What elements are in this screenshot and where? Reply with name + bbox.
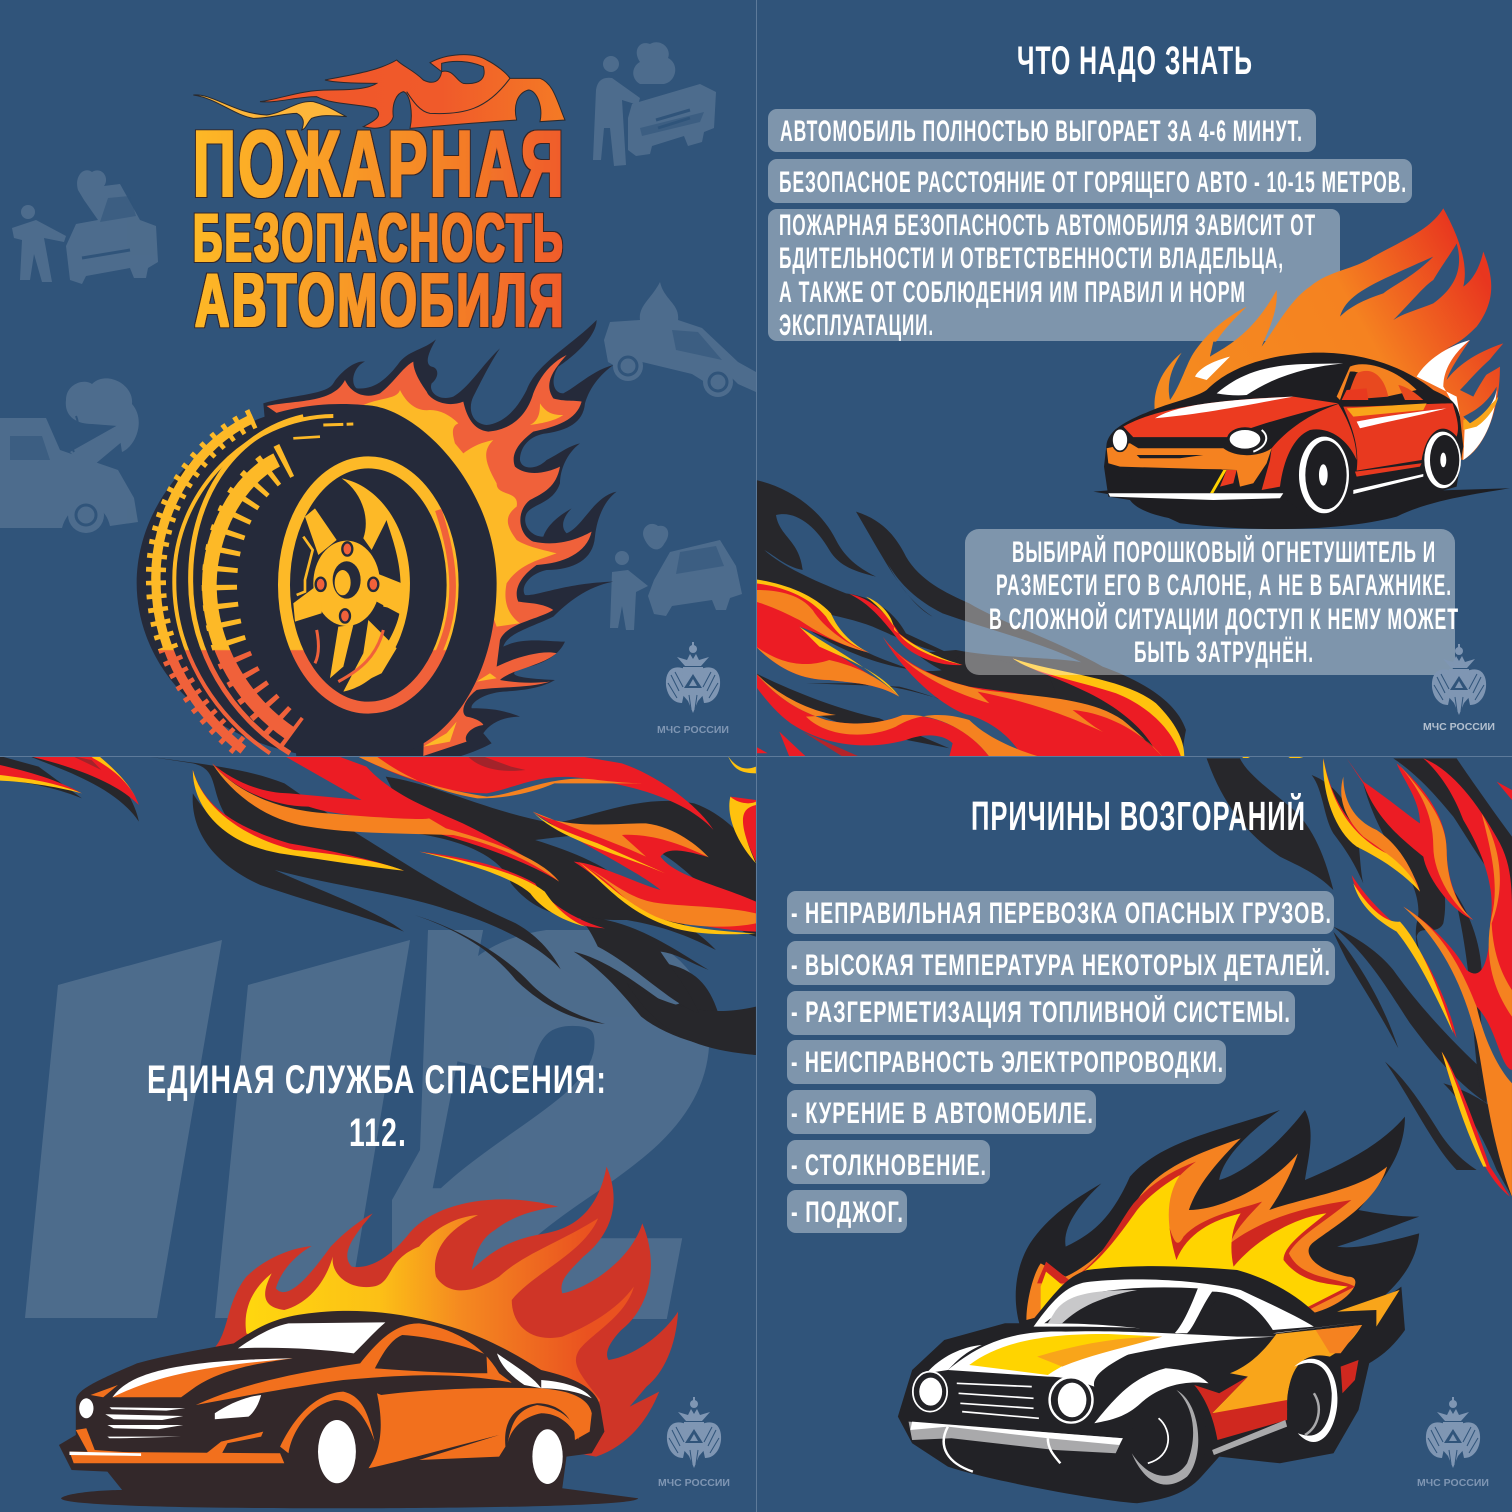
heading: what to know: ЧТО НАДО ЗНАТЬ xyxy=(1017,39,1253,83)
panel: what to know xyxy=(756,208,1510,757)
tyre body xyxy=(137,404,497,760)
headlights xyxy=(913,1372,947,1412)
wheels xyxy=(1299,437,1349,513)
list item: cargo xyxy=(787,891,1334,934)
wheels xyxy=(1132,1390,1207,1487)
emblem: MChS, panel 2 xyxy=(1423,644,1495,733)
callout: burn time xyxy=(768,109,1316,152)
panel: causes xyxy=(898,750,1512,1503)
body: black roof xyxy=(1030,1266,1359,1450)
callout: extinguisher xyxy=(965,529,1459,675)
heading: single rescue service: ЕДИНАЯ СЛУЖБА СПАСЕНИЯ: xyxy=(147,1058,607,1102)
list item: arson xyxy=(787,1190,907,1233)
title: ПОЖАРНАЯ xyxy=(193,111,566,216)
bumpers and fenders xyxy=(1094,1368,1209,1423)
text: owner responsibility: ЭКСПЛУАТАЦИИ. xyxy=(779,309,934,342)
side xyxy=(1343,403,1458,471)
list item: collision xyxy=(787,1140,990,1184)
callout: safe distance xyxy=(768,159,1412,203)
list item: collision: - СТОЛКНОВЕНИЕ. xyxy=(791,1149,987,1182)
list item: wiring: - НЕИСПРАВНОСТЬ ЭЛЕКТРОПРОВОДКИ. xyxy=(791,1046,1224,1079)
icon: person and smoking car, top right xyxy=(593,42,716,166)
emblem: MChS, cover: МЧС РОССИИ xyxy=(657,724,729,736)
title xyxy=(194,128,564,328)
side flame xyxy=(1273,1322,1362,1333)
grille xyxy=(957,1383,1039,1418)
text: owner responsibility xyxy=(779,209,1316,342)
hood xyxy=(112,1358,293,1397)
body xyxy=(1104,353,1463,520)
icon: person and suv, bottom right xyxy=(610,524,742,630)
headlights and grille xyxy=(79,1398,93,1418)
tyre tread xyxy=(156,416,453,753)
side xyxy=(369,1388,592,1468)
flames: dark outline xyxy=(898,1110,1419,1503)
hood xyxy=(948,1331,1276,1377)
emblem: MChS, cover xyxy=(657,642,729,736)
emblem: MChS, panel 4: МЧС РОССИИ xyxy=(1417,1477,1489,1489)
wheel disk xyxy=(293,478,410,692)
title: БЕЗОПАСНОСТЬ xyxy=(193,200,565,276)
callouts: panel 4 xyxy=(787,793,1335,1233)
heading: number 112: 112. xyxy=(349,1111,407,1155)
hood xyxy=(1123,397,1338,437)
front fascia xyxy=(1107,443,1272,487)
flame: dark outline xyxy=(263,320,617,760)
wheel rim ring xyxy=(284,462,453,708)
list item: smoking: - КУРЕНИЕ В АВТОМОБИЛЕ. xyxy=(791,1097,1094,1130)
flame swoosh, top right xyxy=(1207,750,1512,1197)
list item: hot parts xyxy=(787,941,1335,985)
flames: red lines xyxy=(1037,1162,1355,1310)
big faint number: 1 xyxy=(165,839,460,1431)
icon: person and car with raised hood, left xyxy=(12,170,158,284)
emblem: MChS, panel 3 xyxy=(658,1397,730,1489)
flame swoosh, bottom left xyxy=(756,480,1186,757)
icon: car with flame, right xyxy=(604,282,756,397)
callouts: panel 2 xyxy=(768,39,1459,675)
list item: fuel system xyxy=(787,991,1295,1035)
headlights xyxy=(1112,429,1128,451)
flames: orange xyxy=(1026,1138,1387,1320)
icon: flame car over the title xyxy=(193,55,565,130)
flame swoosh, top xyxy=(0,756,756,1055)
flames xyxy=(213,1167,678,1457)
list item: wiring xyxy=(787,1040,1226,1084)
flame: orange xyxy=(267,355,592,756)
panel: rescue number xyxy=(0,756,756,1508)
emblem: MChS, panel 4 xyxy=(1417,1397,1489,1489)
title: АВТОМОБИЛЯ xyxy=(195,258,566,342)
heading: causes of fires: ПРИЧИНЫ ВОЗГОРАНИЙ xyxy=(971,793,1306,839)
wheels xyxy=(318,1420,356,1483)
ground shadow xyxy=(1093,488,1510,529)
flames xyxy=(1154,208,1503,460)
big faint number xyxy=(25,930,709,1319)
list item: arson: - ПОДЖОГ. xyxy=(791,1196,904,1229)
roof trim xyxy=(1034,1279,1314,1333)
windshield xyxy=(238,1322,385,1353)
illustration: black car with flames xyxy=(898,1110,1419,1503)
callout box: owner responsibility xyxy=(768,209,1340,341)
list item: smoking xyxy=(787,1090,1096,1134)
body xyxy=(59,1311,638,1508)
emblem: MChS, panel 2: МЧС РОССИИ xyxy=(1423,721,1495,733)
big faint number: 2 xyxy=(392,839,695,1431)
flames: yellow xyxy=(1041,1175,1348,1310)
flame: yellow xyxy=(360,390,563,747)
callout: extinguisher: БЫТЬ ЗАТРУДНЁН. xyxy=(1134,636,1314,669)
illustration: red car with flames xyxy=(1093,208,1510,529)
front fender xyxy=(1262,404,1357,490)
icon: car with smoke, left lower xyxy=(0,378,139,533)
panel: cover xyxy=(0,42,756,760)
illustration: burning tyre xyxy=(137,320,617,760)
emblem: MChS, panel 3: МЧС РОССИИ xyxy=(658,1477,730,1489)
icons: faint breakdown scenes xyxy=(0,42,756,630)
spark xyxy=(1337,1290,1400,1327)
illustration: orange car with flames xyxy=(59,1167,678,1508)
